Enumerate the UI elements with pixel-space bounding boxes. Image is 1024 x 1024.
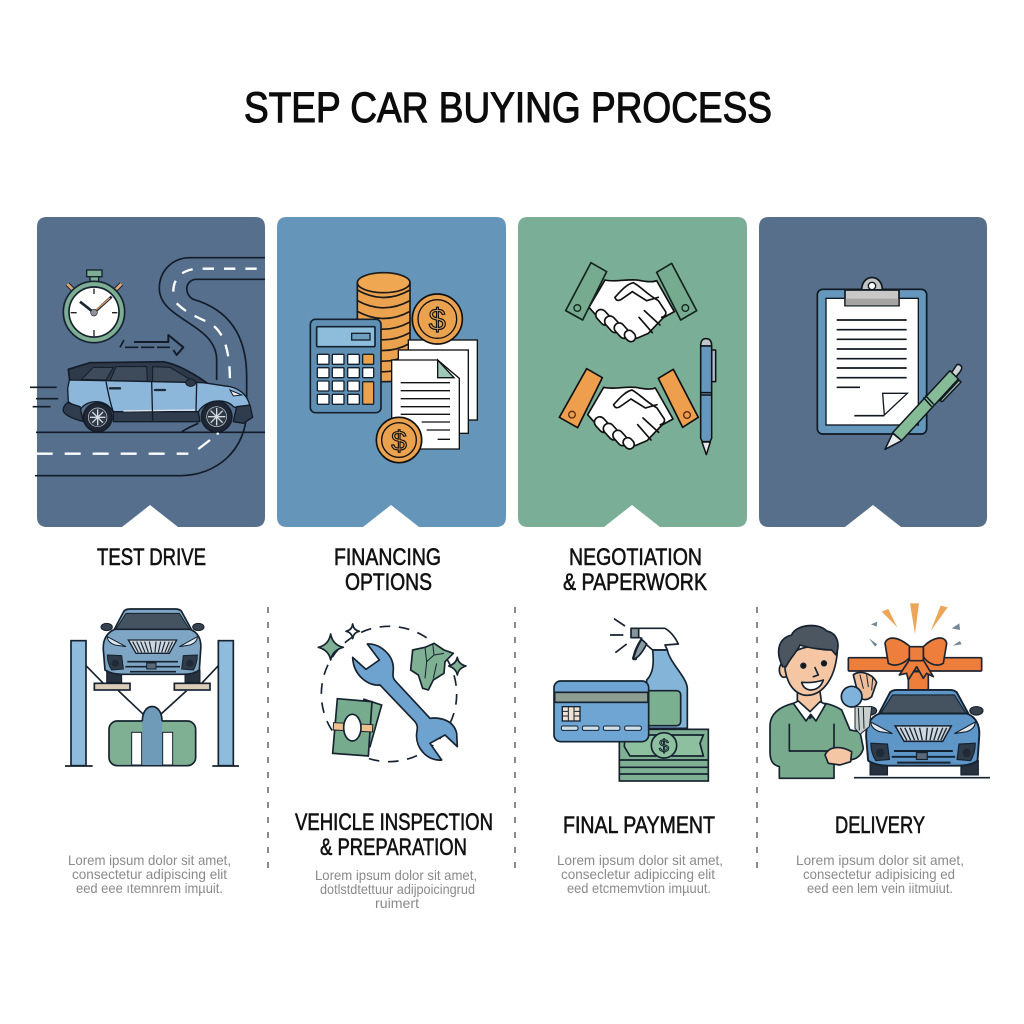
spray bottle: [610, 619, 687, 728]
ribbon: [848, 638, 982, 691]
text block: inspection description: Lorem ipsum dolor sit amet,: [315, 867, 477, 883]
lift base: [109, 706, 196, 766]
heading: delivery: DELIVERY: [835, 812, 925, 839]
icon: coins, calculator and documents: [310, 273, 477, 463]
lift posts: [65, 641, 239, 766]
text block: test drive description: consectetur adipiscing elit: [72, 866, 227, 882]
heading: final payment: FINAL PAYMENT: [563, 812, 715, 839]
speed lines: [30, 387, 58, 407]
car front: [101, 609, 204, 682]
handshake: green cuffs: [566, 263, 697, 344]
heading: vehicle inspection and preparation: [295, 809, 493, 861]
text block: inspection description: dotlstdtettuur adijpoicingrud: [320, 881, 475, 897]
title: STEP CAR BUYING PROCESS: [244, 84, 772, 132]
panel: negotiation and paperwork: [518, 217, 747, 527]
dashed circle: [321, 626, 457, 762]
text block: delivery description: consectetur adipisicing ed: [803, 866, 955, 882]
stopwatch: [63, 270, 125, 343]
cash stack: [619, 729, 708, 781]
text block: test drive description: eed eee ıtemnrem imµuit.: [76, 880, 223, 896]
text block: inspection description: ruimert: [375, 895, 419, 911]
text block: test drive description: [68, 852, 231, 896]
heading: financing options: OPTIONS: [345, 569, 432, 596]
text block: inspection description: [315, 867, 477, 911]
cash bundle: [333, 699, 382, 756]
calculator: [310, 319, 381, 413]
documents: [392, 340, 477, 449]
heading: financing options: FINANCING: [334, 544, 441, 571]
delivered car: [863, 690, 983, 775]
text block: final payment description: [557, 852, 723, 896]
person: [770, 625, 877, 778]
text block: final payment description: Lorem ipsum dolor sit amet,: [557, 852, 723, 868]
pen: [701, 339, 716, 455]
car: [63, 362, 253, 432]
text block: test drive description: Lorem ipsum dolor sit amet,: [68, 852, 231, 868]
heading: vehicle inspection and preparation: & PREPARATION: [320, 834, 467, 861]
heading: test drive: TEST DRIVE: [97, 544, 206, 571]
heading: negotiation and paperwork: [563, 544, 707, 596]
arrow: [120, 335, 183, 355]
panel: test drive: [30, 217, 265, 527]
text block: delivery description: eed een lem vein iitmuiut.: [807, 880, 953, 896]
handshake: orange cuffs: [559, 369, 698, 451]
icon: wrench, cash and sparkles: [318, 624, 466, 762]
text block: final payment description: consecletur adipiccing elit: [561, 866, 715, 882]
road: [35, 258, 265, 476]
text block: delivery description: [796, 852, 964, 896]
text block: final payment description: eed etcmemvtion imµuut.: [567, 880, 711, 896]
confetti rays: [869, 603, 962, 647]
heading: vehicle inspection and preparation: VEHICLE INSPECTION: [295, 809, 493, 836]
text block: delivery description: Lorem ipsum dolor sit amet,: [796, 852, 964, 868]
panel: paperwork clipboard: [759, 217, 987, 527]
icon: vehicle lift: [65, 609, 239, 766]
icon: handshakes and pen: [559, 263, 716, 455]
sparkles: [318, 624, 359, 660]
heading: negotiation and paperwork: NEGOTIATION: [569, 544, 702, 571]
heading: negotiation and paperwork: & PAPERWORK: [563, 569, 707, 596]
dollar coins: [376, 294, 462, 463]
lift pads: [94, 683, 210, 690]
crumpled leaf: [411, 643, 466, 690]
icon: road, stopwatch and car: [30, 258, 265, 476]
clipboard: [817, 277, 927, 434]
cash stack: $: [659, 736, 669, 756]
icon: clipboard and pen: [817, 277, 962, 449]
heading: financing options: [334, 544, 441, 596]
credit card: [554, 681, 649, 742]
icon: delivery person with gift car: [770, 603, 990, 778]
coin stack: [357, 273, 410, 382]
dollar coins: $: [429, 303, 446, 337]
dollar coins: $: [391, 425, 407, 456]
pen: [885, 364, 962, 449]
panel: financing options: [277, 217, 506, 527]
wrench: [353, 644, 457, 760]
icon: spray bottle, card and cash: [554, 619, 708, 781]
